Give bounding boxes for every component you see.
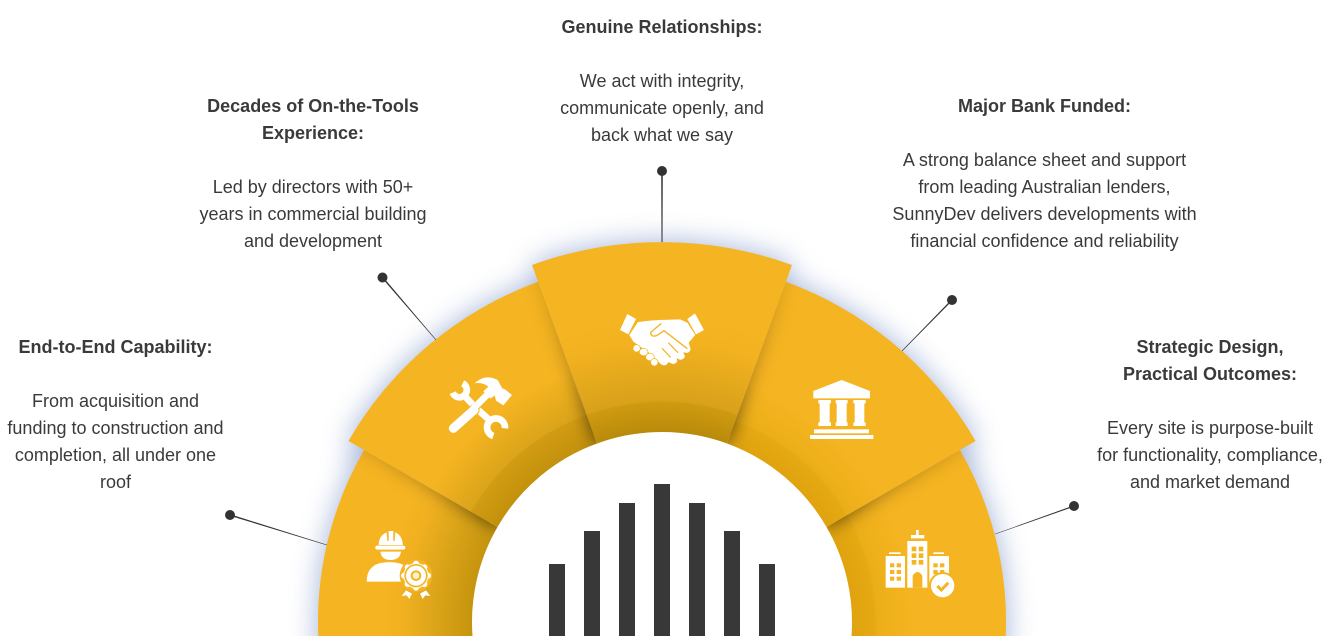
- text: end-to-end capability: From acquisition and: [32, 391, 199, 411]
- segment: decades of experience: [348, 282, 597, 527]
- text: genuine relationships: [560, 17, 764, 145]
- segment: strategic design: [826, 450, 1006, 636]
- segment: genuine relationships: [532, 242, 792, 444]
- text: strategic design: and market demand: [1130, 472, 1290, 492]
- text: decades of on-the-tools experience: and development: [244, 231, 382, 251]
- icon: bank building: [810, 380, 873, 439]
- icon: handshake: [620, 313, 704, 366]
- icon: hammer and wrench: [453, 377, 512, 436]
- text: end-to-end capability: funding to construction and: [7, 418, 224, 438]
- text: major bank funded: financial confidence and reliability: [910, 231, 1179, 251]
- text: end-to-end capability: End-to-End Capability:: [18, 337, 212, 357]
- leader line: major bank: [902, 295, 957, 351]
- text: genuine relationships: We act with integrity,: [580, 71, 744, 91]
- icon: worker with certificate badge: [367, 531, 432, 599]
- leader line: strategic design: [995, 501, 1079, 534]
- text: strategic design: for functionality, compliance,: [1097, 445, 1323, 465]
- text: decades of on-the-tools experience: [199, 96, 427, 251]
- outer blue glow: [318, 242, 1006, 636]
- text: strategic design: Strategic Design,: [1136, 337, 1284, 357]
- text: major bank funded: A strong balance sheet and support: [903, 150, 1186, 170]
- leader line: end-to-end capability: [225, 510, 327, 545]
- segment: end-to-end capability: [318, 450, 498, 636]
- text: genuine relationships: Genuine Relationships:: [561, 17, 763, 37]
- text: end-to-end capability: completion, all under one: [15, 445, 216, 465]
- text: decades of on-the-tools experience: Led by directors with 50+: [213, 177, 413, 197]
- text: decades of on-the-tools experience: years in commercial building: [199, 204, 427, 224]
- text: genuine relationships: communicate openly, and: [560, 98, 764, 118]
- text: major bank funded: from leading Australian lenders,: [918, 177, 1171, 197]
- center bar chart logo: [549, 484, 775, 636]
- icon: buildings with check badge: [886, 530, 956, 599]
- leader line: genuine relationships: [657, 166, 667, 242]
- text: end-to-end capability: [7, 337, 224, 492]
- text: decades of on-the-tools experience: Experience:: [262, 123, 364, 143]
- text: strategic design: Every site is purpose-built: [1107, 418, 1313, 438]
- segment: major bank funded: [727, 282, 976, 527]
- text: strategic design: Practical Outcomes:: [1123, 364, 1297, 384]
- text: end-to-end capability: roof: [100, 472, 131, 492]
- text: major bank funded: [892, 96, 1197, 251]
- text: major bank funded: Major Bank Funded:: [958, 96, 1131, 116]
- text: genuine relationships: back what we say: [591, 125, 733, 145]
- text: major bank funded: SunnyDev delivers developments with: [892, 204, 1197, 224]
- leader line: decades of experience: [378, 272, 436, 340]
- text: decades of on-the-tools experience: Decades of On-the-Tools: [207, 96, 419, 116]
- text: strategic design: [1097, 337, 1323, 492]
